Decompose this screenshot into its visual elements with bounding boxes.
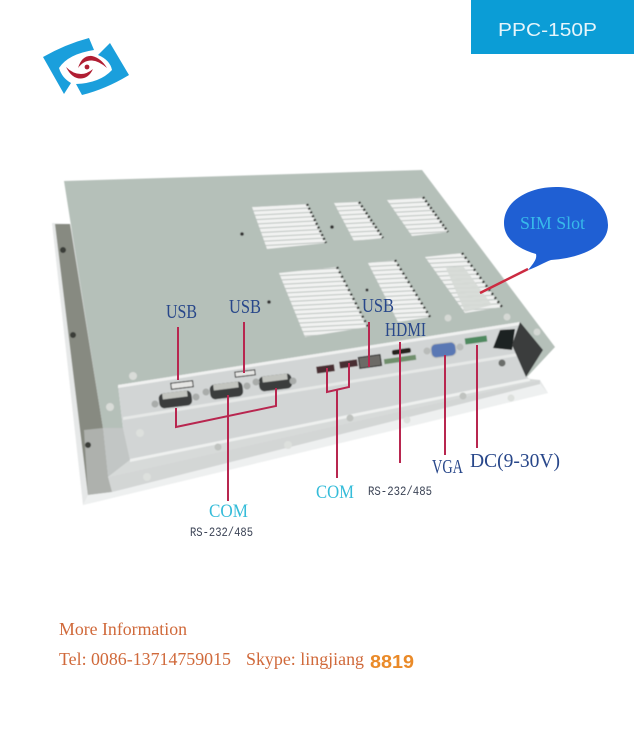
- callout: SIM Slot: SIM Slot: [520, 213, 585, 233]
- product photo: panel PC rear view: [52, 170, 555, 505]
- bezel flange: [52, 223, 548, 505]
- port labels: RS-232/485: [368, 485, 432, 499]
- contact information: 8819: [370, 652, 414, 672]
- port labels: DC(9-30V): [470, 450, 560, 472]
- VGA connector: [424, 341, 464, 358]
- contact information: Tel: 0086-13714759015: [59, 649, 231, 669]
- contact information: More Information: [59, 619, 187, 639]
- rear housing top face: [64, 170, 555, 428]
- contact information: [59, 619, 414, 672]
- port labels: RS-232/485: [190, 526, 253, 540]
- power socket and flap: [493, 322, 543, 377]
- port labels: HDMI: [385, 319, 426, 341]
- port labels: USB: [229, 296, 261, 318]
- port labels: VGA: [432, 456, 463, 478]
- USB slots: [171, 355, 382, 389]
- port labels: [166, 295, 560, 540]
- logo: [43, 38, 129, 95]
- callout: SIM Slot: [480, 187, 608, 293]
- leader lines: [176, 322, 477, 501]
- terminal and HDMI connectors: [384, 335, 487, 364]
- serial COM connectors: [152, 373, 296, 409]
- port labels: COM: [209, 501, 248, 522]
- rear housing front face: [103, 314, 540, 481]
- port labels: USB: [166, 301, 197, 323]
- model badge: PPC-150P: [498, 20, 597, 40]
- port labels: USB: [362, 295, 394, 317]
- port labels: COM: [316, 482, 354, 503]
- model badge: [471, 0, 634, 54]
- contact information: Skype: lingjiang: [246, 649, 364, 669]
- ventilation grilles: [240, 197, 502, 337]
